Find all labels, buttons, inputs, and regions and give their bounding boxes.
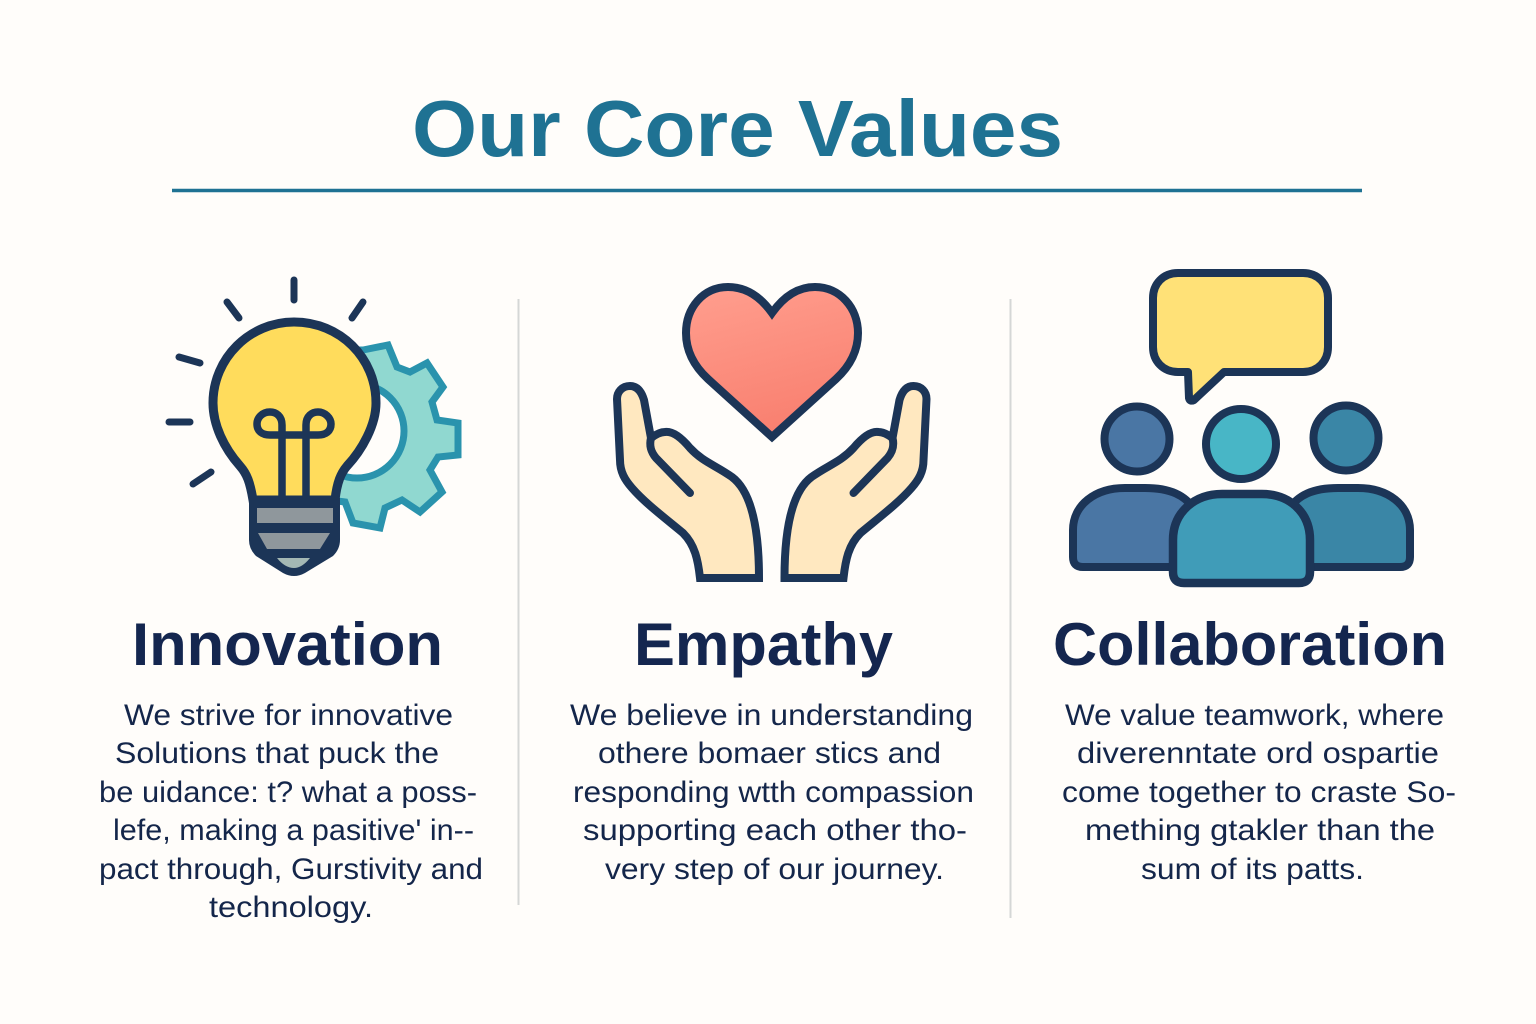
panel: collaboration xyxy=(1053,273,1456,886)
panel: innovation xyxy=(99,280,483,924)
text: innovation description xyxy=(99,699,483,924)
text: innovation description: lefe, making a pasitive' in-- xyxy=(113,814,474,847)
heading: empathy: Empathy xyxy=(634,611,894,678)
text: collaboration description: We value teamwork, where xyxy=(1065,699,1444,732)
text: collaboration description xyxy=(1062,699,1456,886)
text: empathy description: supporting each other tho- xyxy=(583,814,967,847)
icon: team with speech bubble xyxy=(1073,273,1410,583)
heading: collaboration: Collaboration xyxy=(1053,611,1447,678)
text: collaboration description: come together to craste So- xyxy=(1062,776,1456,809)
heading: innovation: Innovation xyxy=(132,611,443,678)
light rays xyxy=(169,280,363,484)
bulb base xyxy=(249,498,340,576)
text: innovation description: pact through, Gurstivity and xyxy=(99,853,483,886)
text: empathy description: othere bomaer stics and xyxy=(598,737,941,770)
text: innovation description: Solutions that puck the xyxy=(115,737,439,770)
text: collaboration description: mething gtakler than the xyxy=(1085,814,1435,847)
text: empathy description: very step of our journey. xyxy=(605,853,944,886)
filament xyxy=(257,412,331,500)
person: centre xyxy=(1173,409,1310,583)
gear xyxy=(310,345,458,528)
text: empathy description: We believe in understanding xyxy=(570,699,973,732)
left hand xyxy=(617,386,759,578)
text: empathy description xyxy=(570,699,974,886)
speech bubble xyxy=(1153,273,1328,401)
text: collaboration description: sum of its patts. xyxy=(1141,853,1364,886)
person: right xyxy=(1288,406,1410,567)
text: innovation description: be uidance: t? what a poss- xyxy=(99,776,477,809)
icon: hands holding heart xyxy=(617,287,926,578)
text: innovation description: We strive for innovative xyxy=(124,699,453,732)
text: empathy description: responding wtth compassion xyxy=(573,776,974,809)
heart xyxy=(686,287,858,437)
title: Our Core Values xyxy=(412,84,1063,173)
person: left xyxy=(1073,406,1195,567)
bulb glass xyxy=(213,322,376,500)
right hand xyxy=(784,386,926,578)
text: collaboration description: diverenntate ord ospartie xyxy=(1077,737,1439,770)
text: innovation description: technology. xyxy=(209,891,373,924)
icon: light bulb and gear xyxy=(169,280,458,576)
panel: empathy xyxy=(570,287,974,886)
